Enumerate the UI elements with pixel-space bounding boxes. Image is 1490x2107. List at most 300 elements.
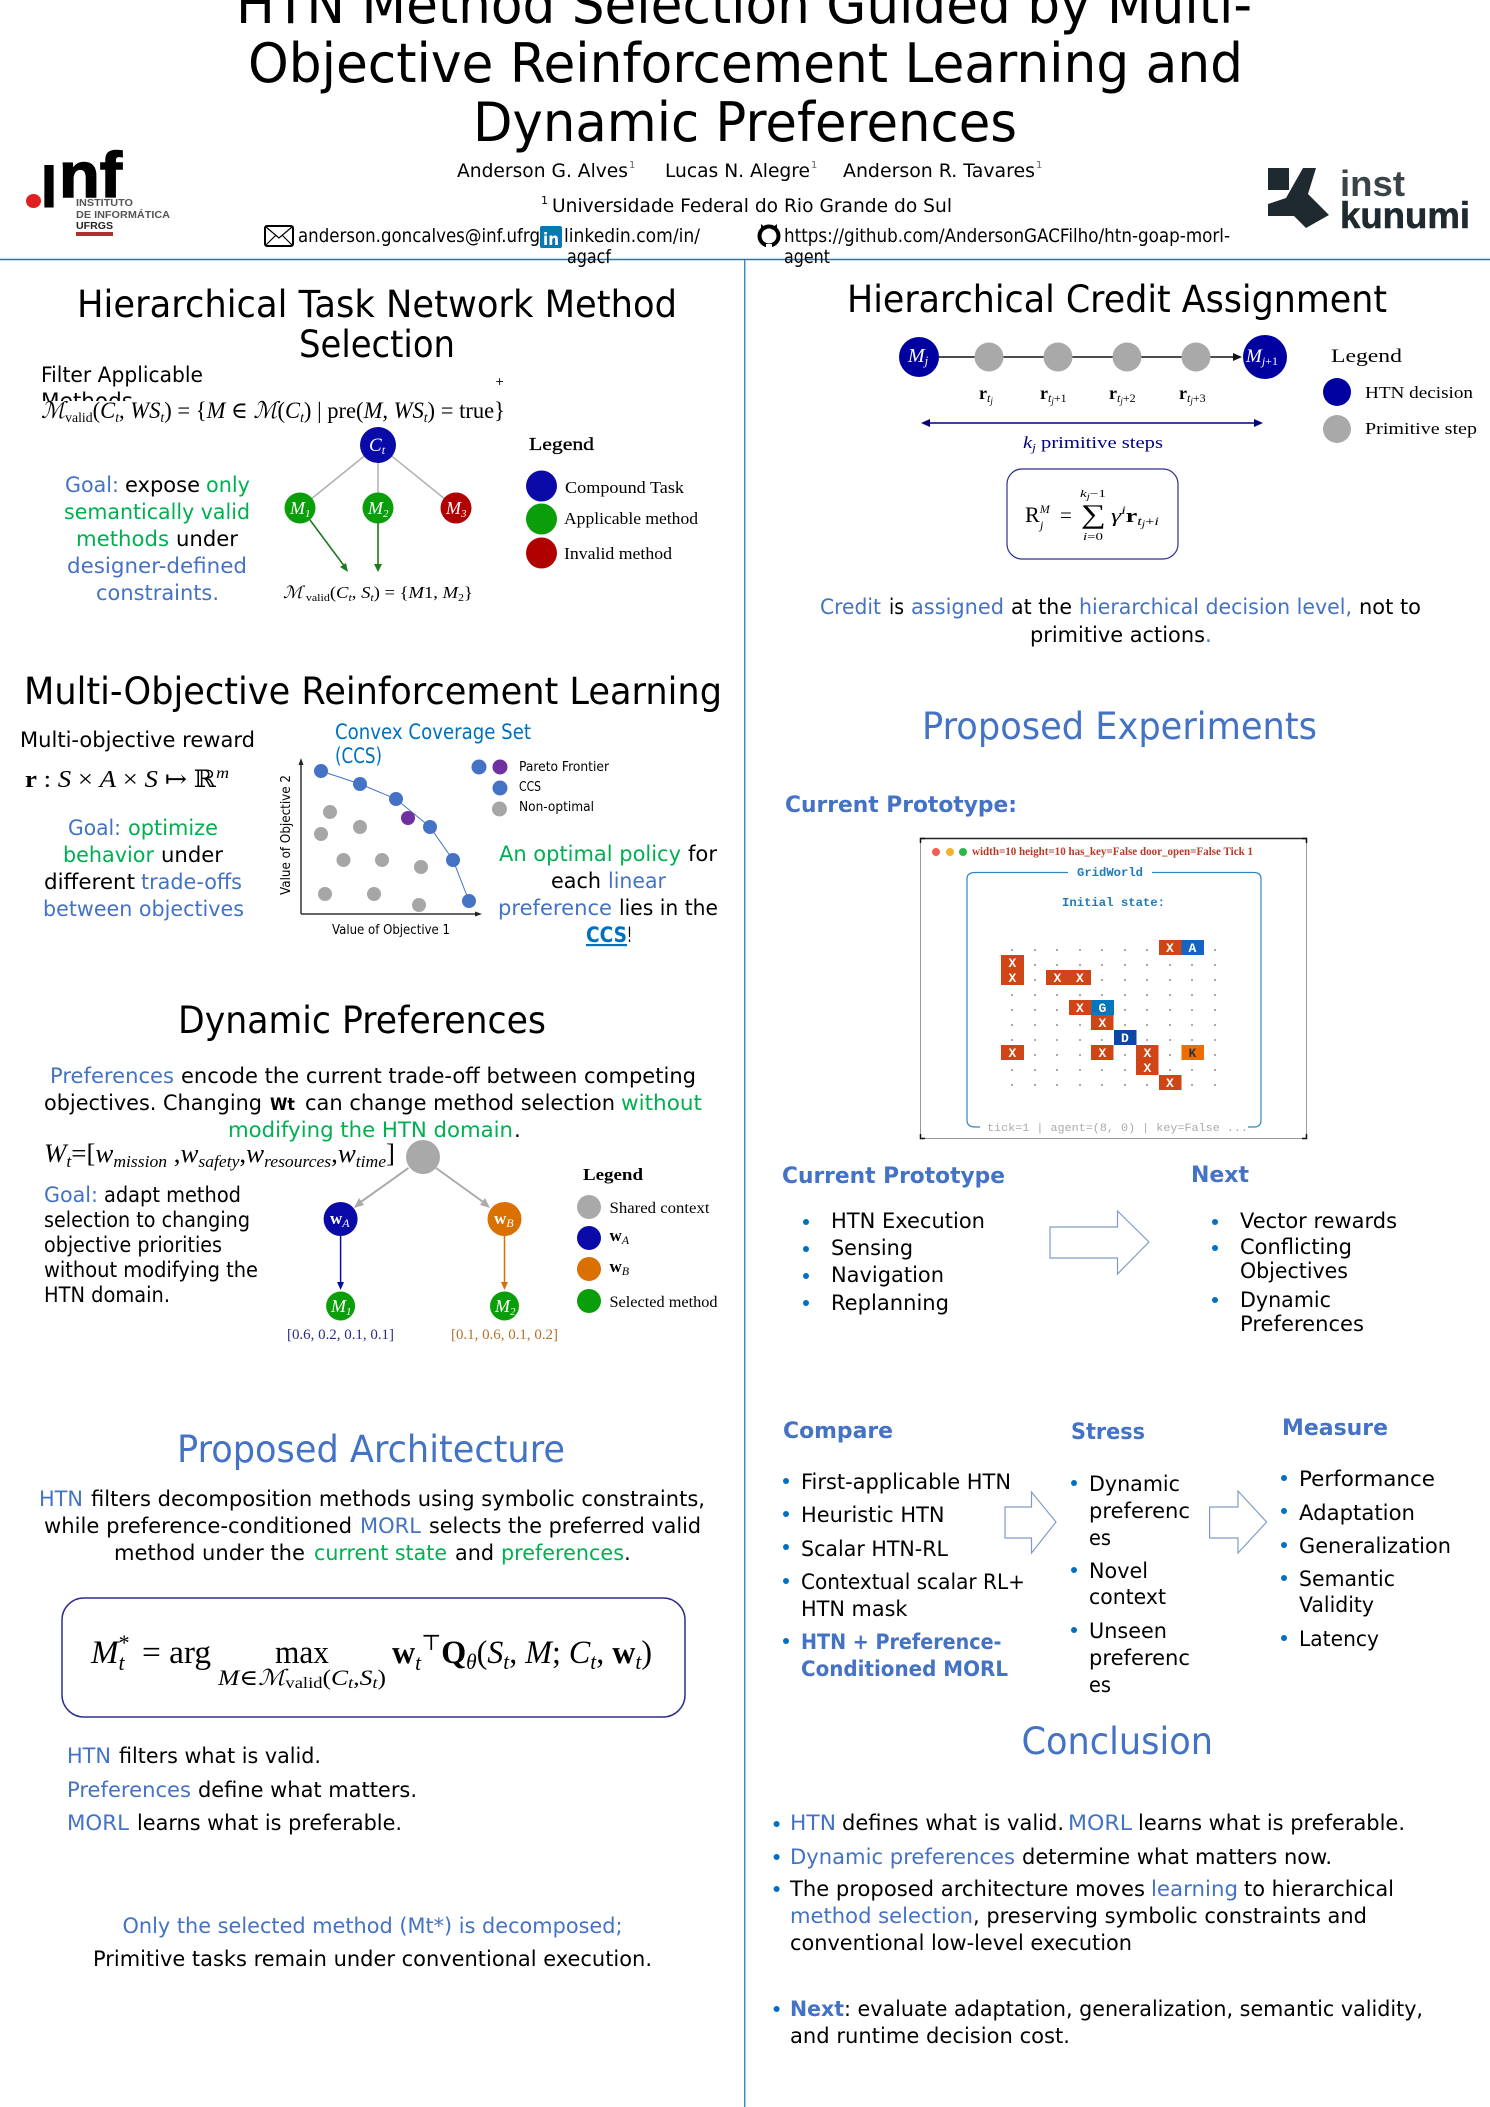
column: current prototype: Navigation [831,1263,944,1288]
text: optimal policy: lies in the [619,896,718,921]
legend: w [610,1226,622,1245]
column: stress: preferenc [1089,1646,1190,1671]
diagram: preference tree: 2 [510,1306,516,1318]
formula box: argmax: ( [477,1635,487,1671]
text: goal: adapt method [104,1183,241,1208]
formula box: argmax: = arg [142,1635,211,1671]
github contact: https://github.com/AndersonGACFilho/htn-goap-morl- [784,225,1230,247]
text: summary: learns what is preferable. [137,1811,402,1836]
diagram: method tree: 1 [305,508,310,520]
column: current prototype: Replanning [831,1291,949,1316]
text: description: filters decomposition methods using symbolic constraints, [91,1487,705,1512]
diagram: preference tree: [0.1, 0.6, 0.1, 0.2] [451,1327,558,1343]
formula box: argmax: M [91,1635,118,1671]
authors: Lucas N. Alegre [665,160,810,182]
formula box: credit sum: t [1137,514,1159,529]
authors: 1 [1036,160,1042,171]
formula box: argmax [62,1598,685,1717]
panel: conclusion [774,1720,1423,2049]
text: intro: Preferences [50,1064,174,1089]
column: measure: Semantic [1299,1567,1395,1592]
screenshot: gridworld prototype: Initial state: [1062,896,1165,910]
formula box: credit sum: r [1126,506,1138,527]
github contact: agent [784,246,830,268]
text: description: current state [314,1541,447,1566]
formula: preference vector: , [167,1139,181,1168]
legend: Legend [529,434,594,454]
diagram: credit chain: j [1119,396,1123,406]
text: summary: define what matters. [198,1778,417,1803]
screenshot: gridworld prototype: width=10 height=10 has_key=False door_open=False Tick 1 [972,844,1253,858]
title [236,0,1252,154]
formula: valid methods: t [300,411,305,426]
text: conclusions list: Next [790,1997,844,2022]
formula box: argmax: , [509,1635,525,1671]
diagram: preference tree: w [494,1209,506,1228]
formula box: argmax: t [348,1675,354,1692]
heading: Proposed Experiments [922,705,1317,748]
formula: preference vector: resources [264,1152,332,1171]
text: optimal policy [498,842,718,948]
diagram: preference tree: M [495,1296,510,1316]
formula box: argmax: Q [441,1635,466,1671]
panel: proposed architecture [39,1428,705,1972]
diagram: preference tree: M [331,1296,346,1316]
text: goal: different [44,870,135,895]
formula: preference vector: t [66,1152,73,1171]
column: compare: Heuristic HTN [801,1503,944,1528]
text: conclusions list: method selection [790,1904,973,1929]
formula: valid methods: t [424,411,429,426]
linkedin contact: in [543,230,559,250]
formula box: argmax: ( [323,1665,331,1690]
formula box: argmax: S [487,1635,503,1671]
bullets [774,1821,780,2012]
diagram: credit chain: j [1050,396,1054,406]
text: intro: can change method selection [305,1091,615,1116]
text: optimal policy: for [688,842,717,867]
diagram: credit chain: M [908,345,925,367]
legend: Invalid method [564,544,673,563]
formula box: argmax: t [118,1650,126,1675]
formula box: argmax: ⊤ [421,1630,441,1655]
linkedin contact [540,225,701,268]
text: goal: semantically valid [64,500,250,525]
formula box: credit sum: ∑ [1081,499,1106,529]
text: conclusions list: to hierarchical [1244,1877,1394,1902]
text: conclusions list: learning [1151,1877,1238,1902]
title: Dynamic Preferences [473,91,1017,154]
linkedin contact: agacf [567,246,612,268]
text: goal: optimize [128,816,218,841]
text: description: method under the [114,1541,305,1566]
text: credit statement: assigned [911,595,1004,620]
formula: valid methods: ) = { [164,398,207,423]
diagram: preference tree: A [341,1216,350,1230]
formula: valid methods: WS [130,398,161,423]
text: credit statement: . [1205,623,1212,648]
diagram: method tree: M [368,498,383,518]
text: conclusions list: MORL [1068,1811,1132,1836]
diagram: preference tree [287,1140,558,1343]
formula box: argmax: w [392,1635,415,1671]
formula box: credit sum: γ [1111,506,1122,527]
text: selected method note: Only the selected method (Mt*) is decomposed; [122,1914,622,1939]
column: compare: First-applicable HTN [801,1470,1011,1495]
text: intro: modifying the HTN domain [228,1118,513,1143]
legend [1323,346,1477,443]
column: next [1191,1162,1397,1337]
formula box: argmax: M∈ℳ [218,1665,282,1690]
diagram: method tree: valid [303,592,330,604]
text: description: MORL [360,1514,421,1539]
chart: pareto frontier scatter: Value of Objective 1 [332,922,450,938]
text: goal: HTN domain. [44,1283,170,1308]
formula box: credit sum: M [1039,502,1051,516]
text: conclusions list: , preserving symbolic constraints and [973,1904,1367,1929]
text: credit statement: not to [1359,595,1421,620]
formula box: argmax: θ [466,1649,477,1674]
diagram: credit chain: j+1 [1262,354,1278,368]
text: goal: selection to changing [44,1208,250,1233]
chart: pareto frontier scatter [278,758,482,938]
text: intro: encode the current trade-off between competing [181,1064,696,1089]
column: next: Next [1191,1162,1249,1188]
diagram: method tree: M [290,498,305,518]
column: next: Vector rewards [1240,1209,1397,1234]
affiliation: 1 [541,194,548,207]
formula: preference vector: , [239,1139,246,1168]
text: summary: Preferences [67,1778,191,1803]
text: optimal policy: linear [608,869,666,894]
column: current prototype: Sensing [831,1236,913,1261]
text: goal [43,816,244,922]
text: goal: only [206,473,250,498]
legend [577,1165,718,1313]
text: conclusions list: defines what is valid. [842,1811,1064,1836]
logo: INF UFRGS: INSTITUTO [76,197,133,209]
text: summary [67,1744,417,1836]
panel: proposed experiments [782,705,1451,1698]
legend: Legend [1331,346,1403,367]
diagram: credit chain: j [1189,396,1193,406]
chart legend: Pareto Frontier [519,759,609,775]
formula box: credit sum [1007,469,1178,559]
column: measure: Adaptation [1299,1501,1415,1526]
formula: valid methods: valid [65,411,93,426]
text: optimal policy: preference [498,896,612,921]
text: selected method note [93,1914,652,1972]
diagram: credit chain: j [1030,442,1036,454]
formula box: argmax: valid [285,1675,323,1692]
legend: Primitive step [1365,419,1477,438]
column: measure: Latency [1299,1627,1379,1652]
column: compare [783,1418,1025,1682]
arrow: prototype to next [1050,1211,1149,1274]
diagram: credit chain: t [1048,391,1067,406]
diagram: method tree: M [446,498,461,518]
text: conclusions list: The proposed architecture moves [789,1877,1145,1902]
subheading: current prototype: Current Prototype: [785,792,1017,818]
diagram: credit chain: r [979,383,987,403]
linkedin contact: linkedin.com/in/ [564,225,701,247]
diagram: credit chain [899,335,1287,454]
diagram: credit chain: t [987,391,993,406]
formula box: argmax: M; C [525,1635,591,1671]
text: optimal policy: each [551,869,601,894]
text: credit statement: is [889,595,904,620]
screenshot: gridworld prototype: X [1076,1001,1084,1016]
diagram: method tree: M1, M [409,583,457,602]
logo: INF UFRGS: UFRGS [76,220,113,232]
diagram: credit chain: r [1179,383,1187,403]
formula box: credit sum: i [1137,514,1159,529]
column: stress: Dynamic [1089,1472,1180,1497]
screenshot: gridworld prototype: X [1076,971,1084,986]
text: description: preferences [501,1541,624,1566]
screenshot: gridworld prototype: X [1008,971,1016,986]
screenshot: gridworld prototype: D [1121,1031,1129,1046]
text: goal: methods [76,527,169,552]
column: stress [1071,1419,1190,1698]
screenshot: gridworld prototype: K [1188,1046,1196,1061]
chart: pareto frontier scatter: Value of Objective 2 [278,775,294,895]
formula: reward: r : S × A × S ↦ ℝ [25,767,210,793]
screenshot: gridworld prototype: X [1098,1016,1106,1031]
heading: Selection [299,323,455,366]
formula box: credit sum: R [1025,502,1040,527]
diagram: credit chain: primitive steps [1036,433,1163,452]
text: goal: under [176,527,238,552]
diagram: method tree: t [370,592,375,604]
panel: multi-objective RL [20,670,722,948]
text: credit statement: Credit [820,595,881,620]
formula: preference vector: w [338,1139,355,1168]
chart legend: CCS [519,779,541,795]
text: conclusions list [789,1811,1423,2049]
column: measure: Validity [1299,1593,1374,1618]
formula: preference vector: w [246,1139,263,1168]
formula box: credit sum: −1 [1090,488,1106,500]
text: filter applicable methods: Filter Applicable [41,363,203,388]
screenshot: gridworld prototype: X [1166,941,1174,956]
authors: 1 [629,160,635,171]
text: conclusions list: conventional low-level execution [790,1931,1132,1956]
column: next: Preferences [1240,1312,1364,1337]
diagram: credit chain: +3 [1193,391,1206,405]
text: conclusions list: : evaluate adaptation, generalization, semantic validity, [844,1997,1423,2022]
authors: Anderson G. Alves [457,160,628,182]
title: Objective Reinforcement Learning and [248,32,1243,95]
column: stress: es [1089,1526,1111,1551]
formula box: argmax: * [119,1630,130,1655]
arrow: compare to stress [1005,1492,1056,1553]
text: conclusions list: HTN [790,1811,836,1836]
formula box: credit sum: i [1121,503,1126,517]
legend: B [622,1264,630,1278]
text: description [39,1487,705,1566]
formula box: credit sum: j [1140,519,1146,529]
label: convex coverage set: (CCS) [335,744,382,769]
text: goal: under [161,843,223,868]
legend: Shared context [610,1200,710,1217]
column: measure: Performance [1299,1467,1435,1492]
formula box: credit sum: = [1060,503,1072,527]
label: convex coverage set [335,720,531,769]
formula box: credit sum: j [1038,518,1044,532]
chart legend: Non-optimal [519,799,594,815]
formula box: argmax: max [275,1635,329,1671]
text: reward: Multi-objective reward [20,728,255,753]
text: conclusions list: and runtime decision cost. [790,2024,1070,2049]
heading: Multi-Objective Reinforcement Learning [24,670,722,713]
formula box: argmax: S [360,1665,372,1690]
diagram: credit chain: r [1040,383,1048,403]
heading: Hierarchical Task Network Method [77,283,677,326]
text: goal: Goal: [68,816,121,841]
panel: hierarchical credit assignment [820,278,1477,648]
column: compare: Contextual scalar RL+ [801,1570,1025,1595]
formula: valid methods: M ∈ ℳ(C [207,398,300,423]
text: filter applicable methods [30,363,510,431]
text: goal: expose [125,473,200,498]
column: compare: HTN mask [801,1597,908,1622]
text: goal [44,1183,258,1308]
screenshot: gridworld prototype [920,838,1307,1138]
screenshot: gridworld prototype: X [1166,1076,1174,1091]
diagram: preference tree: [0.6, 0.2, 0.1, 0.1] [287,1327,394,1343]
formula box: credit sum: i=0 [1083,531,1104,543]
screenshot: gridworld prototype: GridWorld [1077,866,1143,880]
column: stress: Unseen [1089,1619,1167,1644]
diagram: method tree: 3 [460,508,467,520]
logo: INF UFRGS: nf [59,139,123,211]
authors: 1 [811,160,817,171]
diagram: preference tree: B [506,1216,514,1230]
column: measure: Generalization [1299,1534,1451,1559]
diagram: method tree: 2 [458,592,464,604]
text: intro: without [621,1091,702,1116]
column: next: Conflicting [1240,1235,1352,1260]
column: stress: preferenc [1089,1499,1190,1524]
screenshot: gridworld prototype: A [1188,941,1196,956]
screenshot: gridworld prototype: G [1098,1001,1106,1016]
formula: preference vector: time [356,1152,386,1171]
text: conclusions list: Dynamic preferences [790,1845,1015,1870]
diagram: method tree: C [336,583,349,602]
diagram: method tree: S [361,583,371,602]
formula: valid methods: C [100,398,116,423]
formula box: argmax: C [331,1665,348,1690]
text: description: and [455,1541,494,1566]
formula: preference vector: safety [198,1152,240,1171]
text: optimal policy: CCS [586,923,627,948]
column: stress: es [1089,1673,1111,1698]
formula: valid methods: ) = true} [428,398,505,423]
legend: A [621,1233,630,1247]
text: description: selects the preferred valid [429,1514,701,1539]
legend: w [610,1257,622,1276]
formula: preference vector: , [331,1139,338,1168]
formula: valid methods: t [115,411,120,426]
formula: valid methods: M, WS [363,398,424,423]
formula: preference vector: ] [386,1139,395,1168]
formula: valid methods: ) | pre( [304,398,364,423]
logo: INF UFRGS [26,139,170,236]
text: goal: without modifying the [44,1258,258,1283]
panel: dynamic preferences [44,999,718,1343]
formula box: argmax: w [612,1635,636,1671]
github contact [760,224,1230,268]
text: summary: MORL [67,1811,129,1836]
formula box: argmax: t [635,1649,642,1674]
column: current prototype: HTN Execution [831,1209,985,1234]
legend [526,434,699,568]
legend: Legend [583,1165,644,1184]
formula: preference vector: w [181,1139,198,1168]
legend: HTN decision [1365,383,1474,402]
text: filter applicable methods: + [495,375,504,388]
diagram: credit chain: +2 [1123,391,1136,405]
formula: valid methods: ( [93,398,100,423]
formula: preference vector: W [44,1139,66,1168]
text: credit statement: at the [1011,595,1072,620]
column: next: Objectives [1240,1259,1348,1284]
text: goal: constraints. [96,581,219,606]
column: current prototype: Current Prototype [782,1163,1005,1189]
screenshot: gridworld prototype: X [1098,1046,1106,1061]
text: intro: . [514,1118,521,1143]
column: measure [1281,1415,1451,1652]
column: stress: context [1089,1585,1166,1610]
formula box: argmax: ) [641,1635,652,1671]
text: description: while preference-conditioned [44,1514,352,1539]
diagram: method tree: 2 [383,508,389,520]
text: filter applicable methods: Methods [41,389,133,414]
legend: Applicable method [564,509,699,528]
heading [77,283,677,366]
text: goal: designer-defined [67,554,247,579]
text: goal: between objectives [43,897,244,922]
diagram: method tree: t [348,592,353,604]
text: goal: objective priorities [44,1233,222,1258]
diagram: preference tree: w [330,1209,342,1228]
formula: reward: m [216,765,229,782]
column: current prototype [782,1163,1005,1316]
text: goal: trade-offs [141,870,242,895]
formula: preference vector: mission [113,1152,167,1171]
text: description: HTN [39,1487,83,1512]
diagram: method tree: ( [330,583,336,602]
formula box: argmax: , [353,1665,360,1690]
formula: preference vector: w [95,1139,113,1168]
diagram: credit chain: M [1246,346,1262,367]
heading: Dynamic Preferences [178,999,546,1042]
formula box: argmax: , [596,1635,612,1671]
logo: inst kunumi: kunumi [1340,195,1470,236]
logo: INF UFRGS: DE INFORMÁTICA [76,208,170,221]
label: convex coverage set: Convex Coverage Set [335,720,531,745]
screenshot: gridworld prototype: X [1008,956,1016,971]
column: measure: Measure [1282,1415,1388,1441]
column: compare: Conditioned MORL [801,1657,1008,1682]
formula box: argmax: t [590,1649,597,1674]
arrow: stress to measure [1210,1491,1267,1553]
heading: Hierarchical Credit Assignment [847,278,1387,321]
column: stress: Novel [1089,1559,1148,1584]
formula: valid methods: t [160,411,165,426]
column: stress: Stress [1071,1419,1145,1445]
